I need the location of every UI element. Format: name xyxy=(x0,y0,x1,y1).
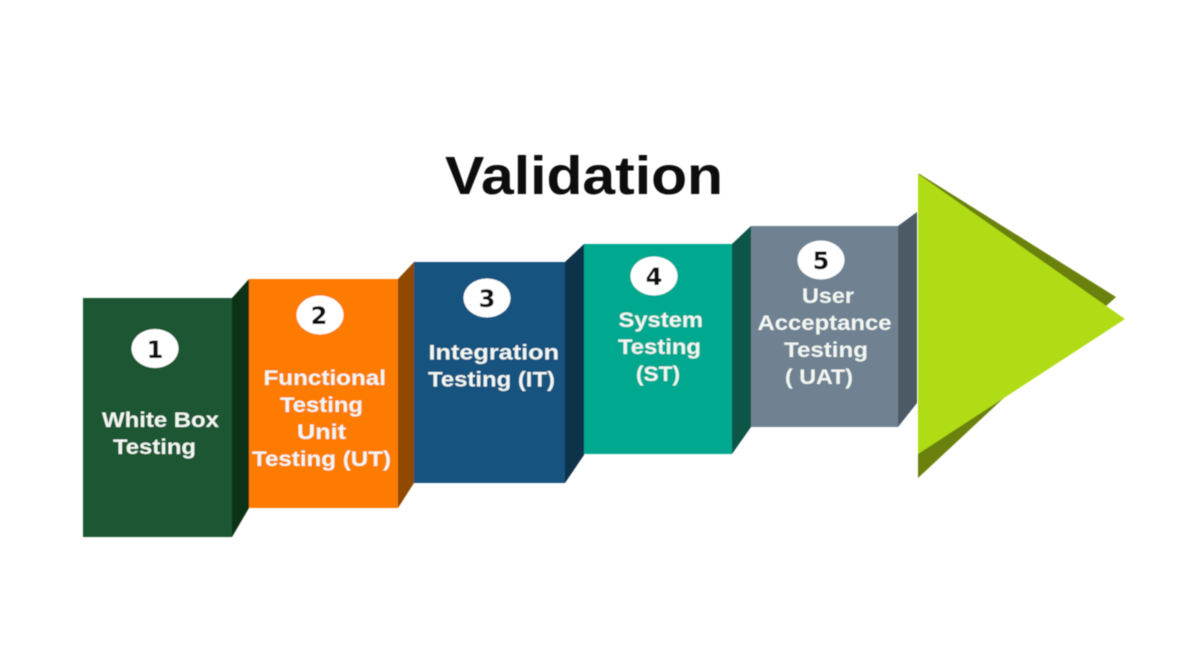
badge: 5 xyxy=(798,240,844,280)
label: functional testing unit testing: Testing (UT) xyxy=(252,448,391,471)
label: functional testing unit testing: Unit xyxy=(297,421,346,444)
label: functional testing unit testing: Testing xyxy=(280,394,363,417)
label: user acceptance testing: User xyxy=(802,285,854,308)
label: user acceptance testing xyxy=(758,285,892,389)
badge: 3 xyxy=(464,278,510,318)
badge: 2: 2 xyxy=(311,302,327,330)
badge: 1 xyxy=(132,329,178,368)
panel: step 5 user acceptance testing xyxy=(751,212,917,427)
panel: step 1 white box testing xyxy=(83,279,249,537)
label: integration testing: Testing (IT) xyxy=(428,368,555,392)
label: system testing: Testing xyxy=(618,336,701,359)
arrow head xyxy=(918,173,1125,478)
label: integration testing xyxy=(428,342,559,392)
label: user acceptance testing: ( UAT) xyxy=(785,366,853,389)
label: system testing: System xyxy=(618,309,703,332)
label: functional testing unit testing xyxy=(252,367,391,471)
title: Validation xyxy=(445,146,723,206)
panel: step 3 integration testing xyxy=(414,244,584,483)
badge: 4 xyxy=(630,256,678,296)
label: functional testing unit testing: Functional xyxy=(264,367,386,390)
badge: 5: 5 xyxy=(813,247,829,275)
panel: step 2 functional testing xyxy=(249,262,414,508)
badge: 3: 3 xyxy=(479,285,495,313)
label: system testing: (ST) xyxy=(636,363,680,386)
label: white box testing: Testing xyxy=(113,436,196,459)
label: system testing xyxy=(618,309,703,386)
label: user acceptance testing: Acceptance xyxy=(758,312,892,335)
label: white box testing: White Box xyxy=(102,409,219,432)
label: integration testing: Integration xyxy=(428,342,559,364)
badge: 1: 1 xyxy=(147,336,163,364)
label: white box testing xyxy=(102,409,219,459)
label: user acceptance testing: Testing xyxy=(784,339,868,362)
panel: step 4 system testing xyxy=(584,226,751,454)
badge: 2 xyxy=(296,296,344,334)
badge: 4: 4 xyxy=(646,263,662,291)
